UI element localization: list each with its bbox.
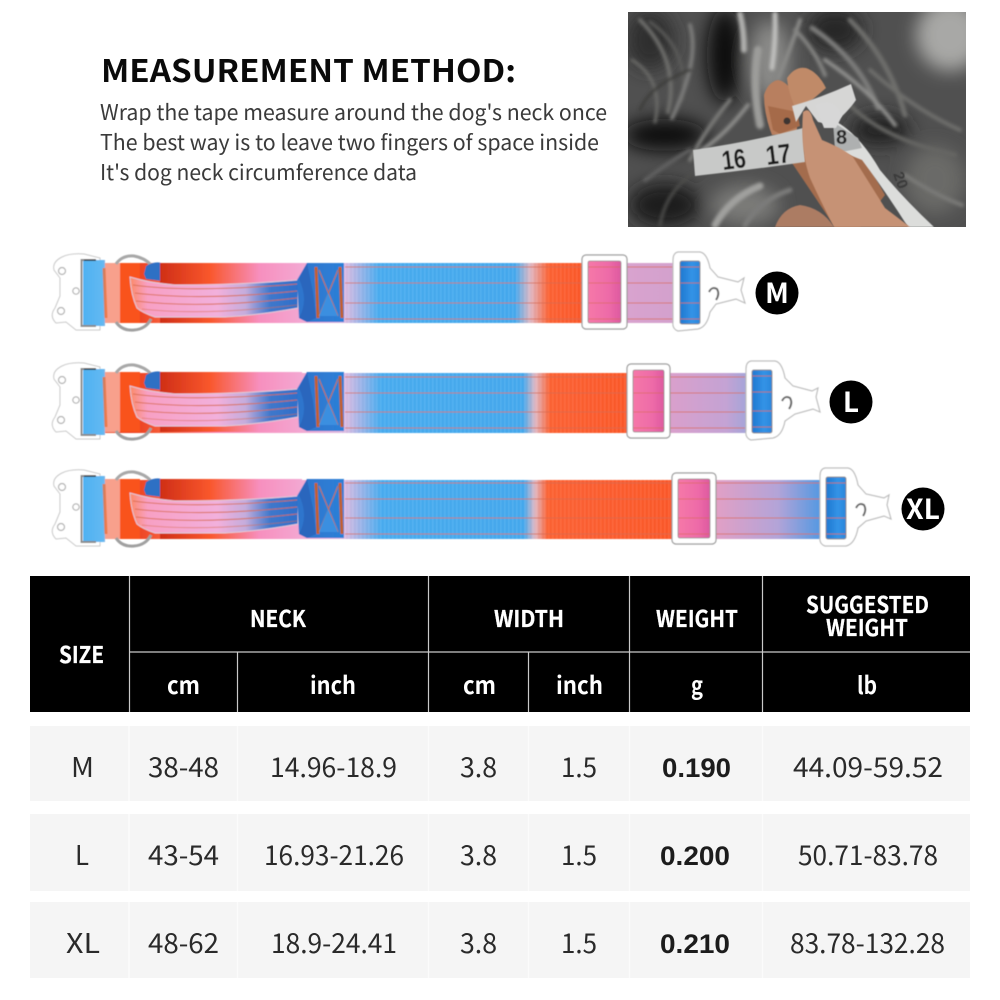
measuring tape: 8 (836, 127, 847, 149)
table row XL: 18.9-24.41 (271, 922, 397, 961)
table row L: 50.71-83.78 (798, 834, 938, 873)
table header: WIDTH (494, 600, 564, 634)
table row M: 3.8 (460, 746, 497, 785)
table header: SUGGESTED (806, 586, 929, 620)
table row XL: 0.210 (660, 929, 730, 959)
table row M: 14.96-18.9 (270, 746, 397, 785)
photo: tape measure on dog neck (628, 12, 966, 227)
table header (30, 576, 970, 712)
measuring tape: 20 (889, 170, 911, 191)
table header: inch (310, 666, 356, 701)
table row XL: 83.78-132.28 (790, 922, 945, 961)
slide buckle XL (672, 473, 716, 544)
table row M: 0.190 (662, 753, 731, 783)
table header: cm (167, 666, 200, 701)
table header: WEIGHT (656, 600, 738, 634)
table header: cm (463, 666, 496, 701)
table row L: 3.8 (460, 834, 497, 873)
table row M: 1.5 (561, 746, 597, 785)
title: MEASUREMENT METHOD: (101, 46, 516, 91)
measurement instructions (100, 96, 607, 187)
measuring tape (693, 84, 934, 227)
table header: SIZE (59, 636, 104, 670)
measurement instructions: Wrap the tape measure around the dog's neck once (100, 96, 607, 127)
table row XL: XL (66, 922, 100, 961)
size badge L: L (843, 381, 859, 421)
measurement instructions: The best way is to leave two fingers of space inside (100, 126, 599, 157)
end buckle M (673, 252, 745, 331)
table row L: 43-54 (148, 834, 219, 873)
slide buckle M (582, 255, 627, 329)
size badge M (756, 272, 798, 314)
table row M: M (71, 746, 94, 785)
table header: inch (556, 666, 603, 701)
collar: size XL (52, 468, 891, 546)
end buckle L (746, 361, 820, 440)
collar: size L (52, 361, 820, 440)
table header: g (691, 666, 703, 701)
slide buckle L (627, 364, 670, 438)
table row XL (30, 902, 970, 978)
table row M (30, 726, 970, 801)
table row M: 44.09-59.52 (793, 746, 943, 785)
front fingers (802, 102, 910, 227)
table row L (30, 814, 970, 891)
table row L: 0.200 (660, 841, 730, 871)
collar: size M (52, 252, 745, 331)
measurement instructions: It's dog neck circumference data (100, 156, 417, 187)
table header: lb (857, 666, 877, 701)
table row XL: 3.8 (460, 922, 497, 961)
measuring tape: 16 (720, 143, 748, 176)
table row XL: 48-62 (148, 922, 219, 961)
table row L: 1.5 (561, 834, 597, 873)
measuring tape: 17 (764, 138, 793, 171)
fingers behind tape (764, 68, 885, 227)
end buckle XL (820, 468, 891, 546)
table row XL: 1.5 (561, 922, 597, 961)
table header: NECK (250, 600, 306, 634)
size badge L (830, 380, 872, 424)
table row L: 16.93-21.26 (264, 834, 404, 873)
table row M: 38-48 (148, 746, 219, 785)
table header: WEIGHT (826, 609, 908, 643)
size badge XL: XL (906, 488, 940, 528)
table row L: L (75, 834, 89, 873)
size badge M: M (765, 272, 789, 312)
